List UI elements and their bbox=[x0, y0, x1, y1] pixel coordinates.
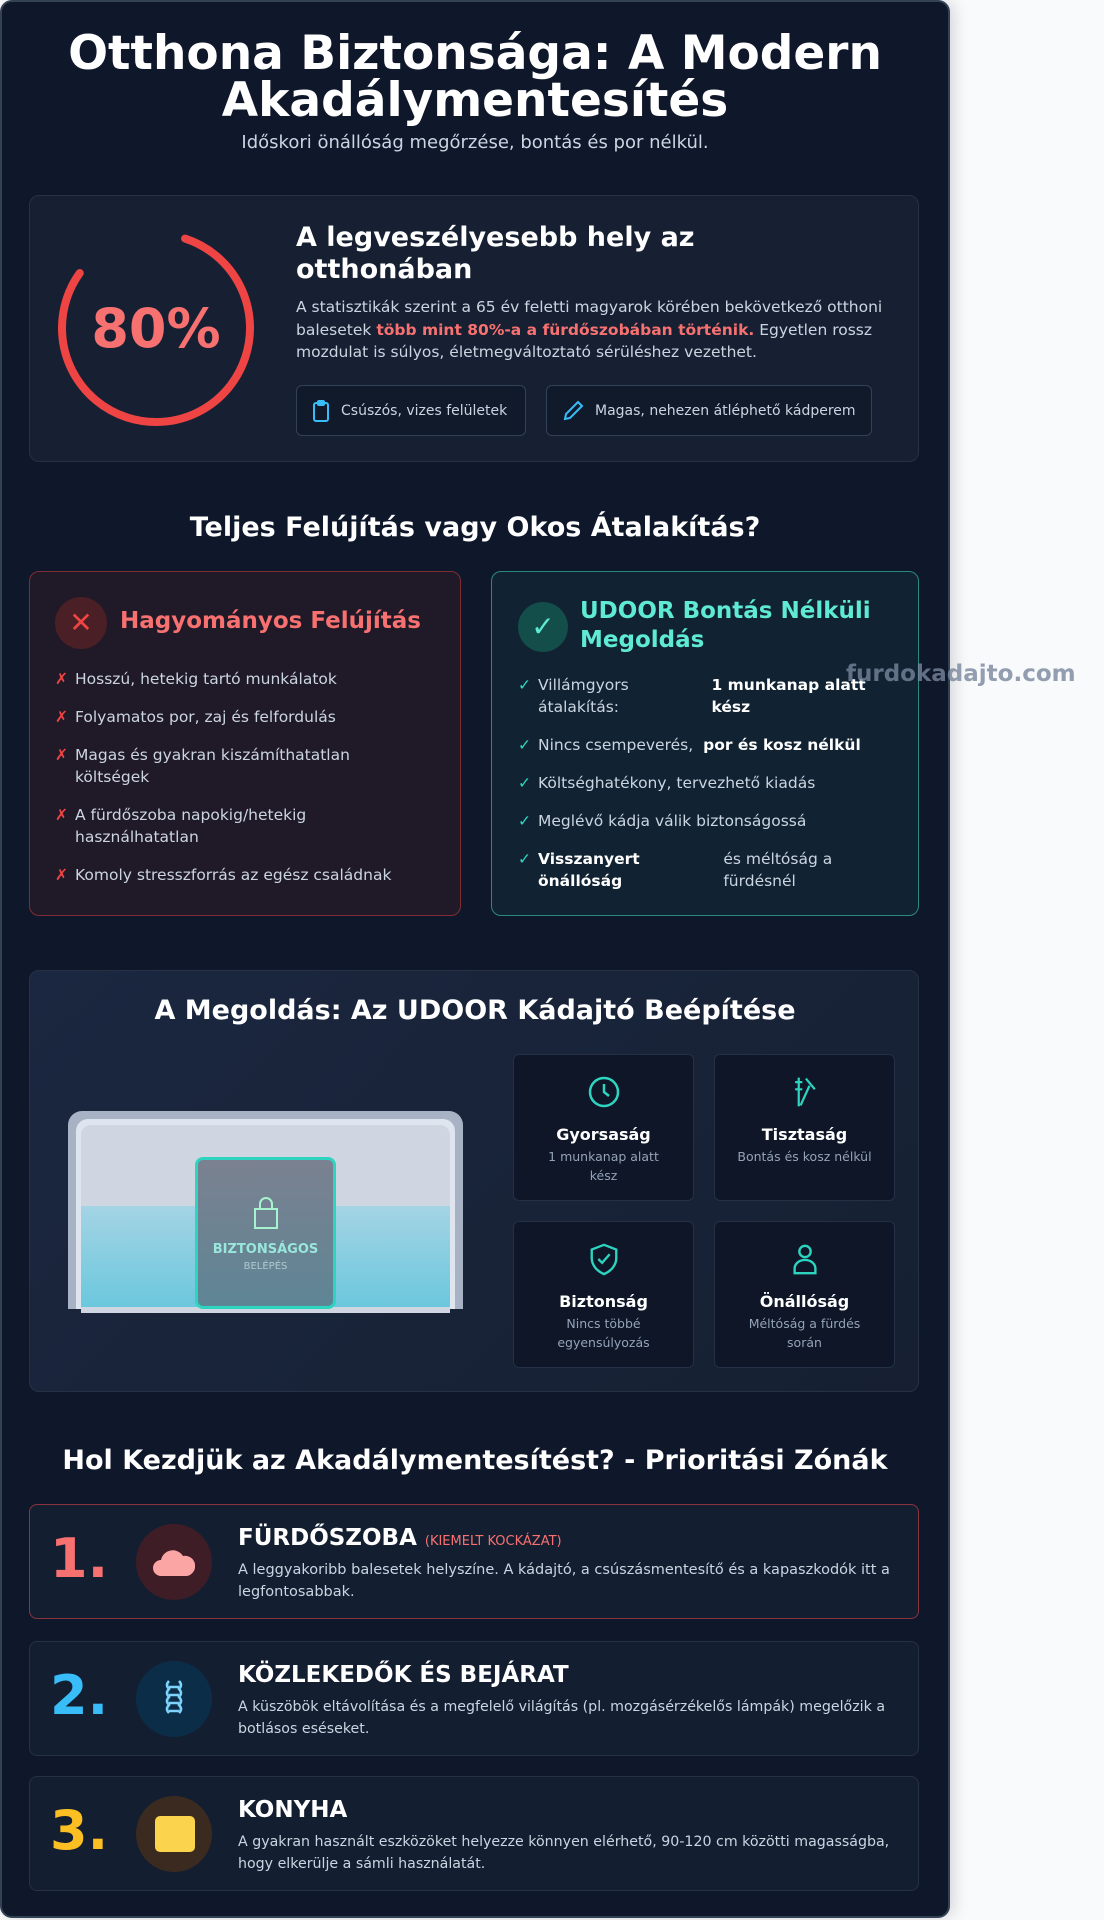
icon: box bbox=[136, 1796, 212, 1872]
title bbox=[68, 26, 882, 128]
list bbox=[518, 676, 866, 890]
list: Meglévő kádja válik biztonságossá bbox=[538, 812, 806, 830]
priority 1: A leggyakoribb balesetek helyszíne. A kádajtó, a csúszásmentesítő és a kapaszkodók itt a legfontosabbak. bbox=[238, 1562, 890, 1600]
priority 1 bbox=[29, 1504, 919, 1619]
feature: speed: 1 munkanap alatt kész bbox=[548, 1149, 659, 1183]
list: Magas és gyakran kiszámíthatatlan költségek bbox=[75, 746, 350, 786]
chart: 80% ring bbox=[58, 234, 254, 426]
icon: x bbox=[55, 597, 107, 649]
list bbox=[55, 670, 392, 884]
list: ✓ bbox=[518, 774, 531, 792]
watermark: furdokadajto.com bbox=[846, 661, 1076, 687]
priority 1: 1. bbox=[50, 1527, 108, 1590]
subtitle: Időskori önállóság megőrzése, bontás és por nélkül. bbox=[241, 132, 709, 153]
list: Hosszú, hetekig tartó munkálatok bbox=[75, 670, 337, 688]
feature: clean bbox=[714, 1054, 895, 1201]
title: Akadálymentesítés bbox=[222, 73, 728, 128]
priority 2: KÖZLEKEDŐK ÉS BEJÁRAT bbox=[238, 1662, 569, 1688]
chart: 80% ring: 80% bbox=[91, 297, 221, 360]
priority 2: 2. bbox=[50, 1664, 108, 1727]
panel: traditional bbox=[29, 571, 461, 916]
panel: statistic bbox=[29, 195, 919, 462]
tag: high edge bbox=[546, 385, 872, 436]
list: Nincs csempeverés, bbox=[538, 736, 693, 754]
heading: Megoldás bbox=[580, 627, 704, 653]
list: ✓ bbox=[518, 850, 531, 868]
heading bbox=[296, 222, 695, 285]
heading: A legveszélyesebb hely az bbox=[296, 222, 695, 253]
heading: comparison: Teljes Felújítás vagy Okos Átalakítás? bbox=[190, 512, 760, 543]
feature: clean: Tisztaság bbox=[762, 1125, 847, 1144]
list: ✗ bbox=[55, 806, 68, 824]
panel: solution bbox=[29, 970, 919, 1392]
list: és méltóság a fürdésnél bbox=[723, 850, 832, 890]
priority 3: KONYHA bbox=[238, 1797, 347, 1823]
feature: safety bbox=[513, 1221, 694, 1368]
tag: slippery bbox=[296, 385, 526, 436]
icon: check bbox=[518, 602, 568, 652]
heading: A Megoldás: Az UDOOR Kádajtó Beépítése bbox=[154, 995, 796, 1026]
heading: Hagyományos Felújítás bbox=[120, 608, 421, 634]
tag: slippery: Csúszós, vizes felületek bbox=[341, 402, 507, 418]
list: Folyamatos por, zaj és felfordulás bbox=[75, 708, 336, 726]
tag: high edge: Magas, nehezen átléphető kádperem bbox=[595, 402, 856, 418]
priority 3: A gyakran használt eszközöket helyezze könnyen elérhető, 90-120 cm közötti magasságba, hogy elkerülje a sámli használatát. bbox=[238, 1834, 889, 1872]
heading: otthonában bbox=[296, 254, 472, 285]
feature: independence: Önállóság bbox=[760, 1292, 849, 1311]
list: Visszanyert önállóság bbox=[538, 850, 640, 890]
list: A fürdőszoba napokig/hetekig használhatatlan bbox=[75, 806, 306, 846]
door bbox=[195, 1157, 336, 1309]
icon: check: ✓ bbox=[531, 610, 555, 643]
list: ✗ bbox=[55, 670, 68, 688]
list: por és kosz nélkül bbox=[703, 736, 861, 754]
feature: clean: Bontás és kosz nélkül bbox=[737, 1149, 872, 1164]
list: ✓ bbox=[518, 812, 531, 830]
priority 1: FÜRDŐSZOBA (KIEMELT KOCKÁZAT) bbox=[238, 1525, 562, 1551]
door: BELÉPÉS bbox=[244, 1261, 287, 1272]
feature: independence bbox=[714, 1221, 895, 1368]
list: ✗ bbox=[55, 866, 68, 884]
priority 3 bbox=[29, 1776, 919, 1891]
text block: A statisztikák szerint a 65 év feletti magyarok körében bekövetkező otthoni balesetek több mint 80%-a a fürdőszobában történik. Egyetlen rossz mozdulat is súlyos, életmegváltoztató sérüléshez vezethet. bbox=[296, 298, 882, 361]
panel: UDOOR bbox=[491, 571, 919, 916]
list: ✗ bbox=[55, 746, 68, 764]
priority 3: 3. bbox=[50, 1799, 108, 1862]
list: ✓ bbox=[518, 736, 531, 754]
door: BIZTONSÁGOS bbox=[213, 1242, 318, 1257]
list: ✓ bbox=[518, 676, 531, 694]
icon: x: ✕ bbox=[69, 606, 93, 639]
feature: speed bbox=[513, 1054, 694, 1201]
list: Költséghatékony, tervezhető kiadás bbox=[538, 774, 815, 792]
icon: path bbox=[136, 1661, 212, 1737]
feature: independence: Méltóság a fürdés során bbox=[749, 1316, 860, 1350]
heading: UDOOR Bontás Nélküli bbox=[580, 598, 871, 624]
priority 2: A küszöbök eltávolítása és a megfelelő világítás (pl. mozgásérzékelős lámpák) megelőzik a botlásos eséseket. bbox=[238, 1699, 885, 1737]
priority 2 bbox=[29, 1641, 919, 1756]
title: Otthona Biztonsága: A Modern bbox=[68, 26, 882, 81]
feature: speed: Gyorsaság bbox=[556, 1125, 651, 1144]
list: ✗ bbox=[55, 708, 68, 726]
feature: safety: Biztonság bbox=[559, 1292, 648, 1311]
list: 1 munkanap alatt kész bbox=[711, 676, 866, 716]
list: Villámgyors átalakítás: bbox=[538, 676, 629, 716]
heading: priority zones: Hol Kezdjük az Akadálymentesítést? - Prioritási Zónák bbox=[62, 1445, 888, 1476]
heading bbox=[580, 598, 871, 653]
illustration: bathtub with door bbox=[68, 1111, 463, 1313]
icon: cloud bbox=[136, 1524, 212, 1600]
feature: safety: Nincs többé egyensúlyozás bbox=[557, 1316, 650, 1350]
list: Komoly stresszforrás az egész családnak bbox=[75, 866, 391, 884]
